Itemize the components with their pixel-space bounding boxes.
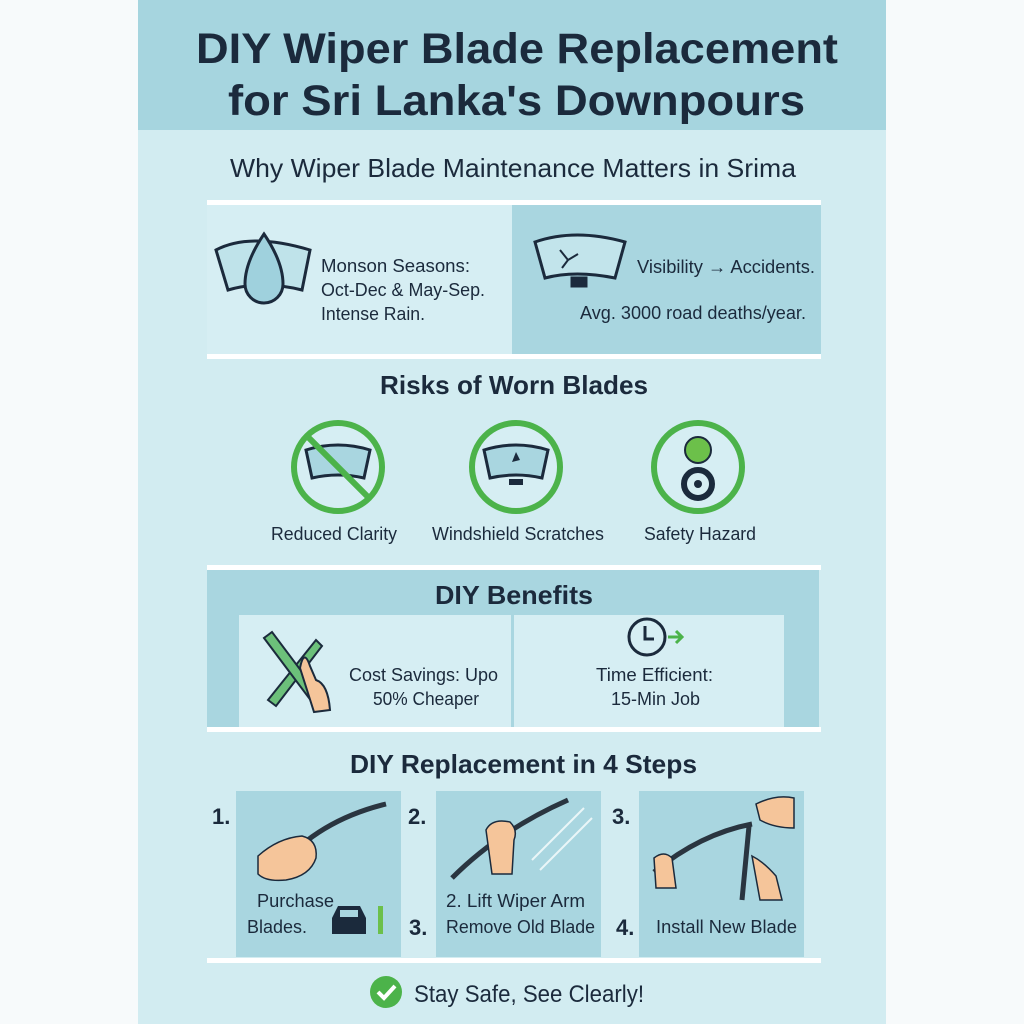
step 2: 3. <box>409 915 427 940</box>
heading: DIY benefits: DIY Benefits <box>435 580 593 610</box>
icon: reduced clarity <box>294 423 382 511</box>
icon: hand holding blade <box>258 804 386 880</box>
text: monsoon seasons: Oct-Dec & May-Sep. <box>321 280 485 300</box>
panel: DIY benefits <box>207 570 819 727</box>
text: monsoon seasons <box>321 256 485 324</box>
text: time efficient: Time Efficient: <box>596 665 713 685</box>
panel: monsoon <box>207 205 512 354</box>
text: time efficient: 15-Min Job <box>611 689 700 709</box>
text: monsoon seasons: Monson Seasons: <box>321 256 470 276</box>
icon: wrenches and hand <box>264 632 330 712</box>
icon: safety hazard <box>654 423 742 511</box>
icon: windshield scratches <box>472 423 560 511</box>
footer: stay safe <box>370 976 644 1008</box>
step 2 <box>408 791 601 957</box>
step 2: Remove Old Blade <box>446 917 595 937</box>
icon: cracked windshield <box>535 235 625 286</box>
text: cost savings <box>349 665 498 709</box>
step 1 <box>212 791 401 957</box>
heading: steps: DIY Replacement in 4 Steps <box>350 749 697 779</box>
heading: risks: Risks of Worn Blades <box>380 370 648 400</box>
title: DIY Wiper Blade Replacement <box>196 25 838 73</box>
step 3: 4. <box>616 915 634 940</box>
step 1: Purchase <box>257 891 334 911</box>
card: cost savings <box>239 615 511 727</box>
step 2: 2. Lift Wiper Arm <box>446 891 585 911</box>
header band <box>138 0 886 130</box>
title: for Sri Lanka's Downpours <box>228 77 805 125</box>
card: time efficient <box>514 615 784 727</box>
labels: risks: Reduced Clarity <box>271 524 397 544</box>
labels: risks <box>271 524 756 544</box>
icon: clock with arrow <box>629 619 682 655</box>
text: visibility accidents <box>580 257 815 323</box>
text: cost savings: Cost Savings: Upo <box>349 665 498 685</box>
step 2: 2. <box>408 804 426 829</box>
step 3 <box>612 791 804 957</box>
main panel background <box>138 0 886 1024</box>
step 1: 1. <box>212 804 230 829</box>
subtitle: Why Wiper Blade Maintenance Matters in Srima <box>230 153 797 183</box>
icon: car <box>332 906 383 934</box>
step 3: 3. <box>612 804 630 829</box>
step 3: Install New Blade <box>656 917 797 937</box>
text: visibility accidents: Avg. 3000 road deaths/year. <box>580 303 806 323</box>
icon: hands installing blade <box>654 797 794 900</box>
panel: visibility <box>512 205 821 354</box>
text: monsoon seasons: Intense Rain. <box>321 304 425 324</box>
footer: stay safe: Stay Safe, See Clearly! <box>414 981 644 1008</box>
text: time efficient <box>596 665 713 709</box>
labels: risks: Safety Hazard <box>644 524 756 544</box>
text: cost savings: 50% Cheaper <box>373 689 479 709</box>
title <box>196 25 838 125</box>
icon: hand lifting blade <box>452 800 592 878</box>
labels: risks: Windshield Scratches <box>432 524 604 544</box>
text: visibility accidents: Visibility → Accidents. <box>637 257 815 277</box>
icon: windshield with raindrop <box>216 234 310 303</box>
step 1: Blades. <box>247 917 307 937</box>
